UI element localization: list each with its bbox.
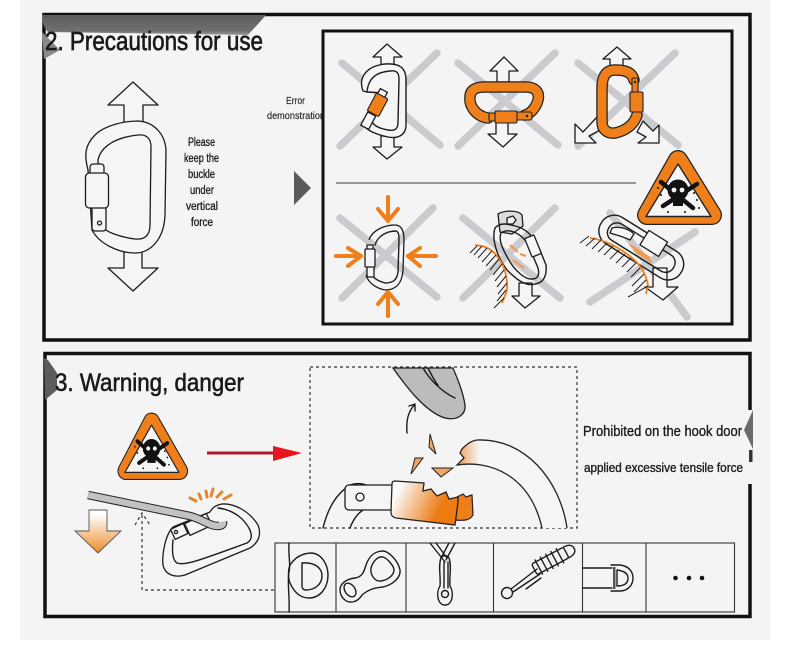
impact sparks	[190, 489, 231, 501]
text: keep vertical force: vertical	[186, 201, 218, 213]
item: strap with D-ring	[582, 565, 633, 591]
text: prohibition: applied excessive tensile force	[584, 461, 743, 475]
correct use carabiner with vertical arrows	[86, 82, 166, 291]
panel: precautions for use	[42, 14, 750, 340]
error 1: side loaded open carabiner	[340, 44, 440, 159]
item: ellipsis	[673, 576, 704, 580]
error 5: carabiner over edge	[463, 208, 560, 308]
text: keep vertical force: force	[191, 217, 213, 229]
heading: warning: 3. Warning, danger	[55, 369, 244, 397]
detail: broken left gate	[323, 481, 473, 528]
heading tab shadow	[42, 15, 266, 35]
detail: gray carabiner nose	[393, 368, 465, 419]
heading corner wedge	[42, 32, 60, 59]
text: error demonstration: demonstration	[267, 110, 325, 122]
text: keep vertical force: keep the	[184, 153, 219, 165]
text: keep vertical force: buckle	[188, 169, 215, 181]
text: prohibition	[583, 424, 743, 475]
error 4: compressed carabiner with orange arrows	[336, 197, 437, 316]
panel: warning, danger	[44, 354, 753, 616]
arrow: pointer to errors	[294, 171, 311, 205]
icon: small danger triangle	[125, 422, 180, 472]
carabiner with loaded strap	[88, 495, 260, 576]
dashed leader line	[135, 513, 275, 590]
error 3: three-way loaded orange carabiner	[575, 47, 678, 146]
error 2: horizontal orange carabiner	[458, 53, 558, 147]
heading: precautions: 2. Precautions for use	[45, 28, 263, 56]
heading tab shadow	[44, 358, 57, 400]
error 6: carabiner bent over edge	[580, 210, 695, 317]
text: prohibition: Prohibited on the hook door	[583, 424, 742, 440]
white text mask and side notch	[578, 410, 753, 484]
text: keep vertical force: under	[190, 185, 214, 197]
detail: broken shards	[411, 434, 453, 477]
text: error demonstration: Error	[286, 95, 305, 107]
arrow: orange downward force	[75, 510, 121, 553]
text: keep vertical force: Please	[188, 137, 215, 149]
dashed detail box	[310, 367, 577, 528]
arrow: red pointer	[207, 446, 302, 461]
connector table	[275, 541, 734, 612]
text: error demonstration	[267, 95, 325, 122]
detail: curved arrow	[407, 404, 415, 433]
item: sling with loop	[430, 543, 455, 605]
item: spring snap hook	[502, 541, 578, 598]
item: figure-eight descender	[340, 551, 400, 602]
item: D-ring on strap	[288, 543, 328, 612]
icon: large danger triangle	[646, 160, 712, 216]
text: keep vertical force	[184, 137, 219, 229]
detail: broken right arc	[457, 440, 567, 528]
divider line	[336, 182, 636, 184]
panel: error demonstrations	[323, 31, 732, 324]
